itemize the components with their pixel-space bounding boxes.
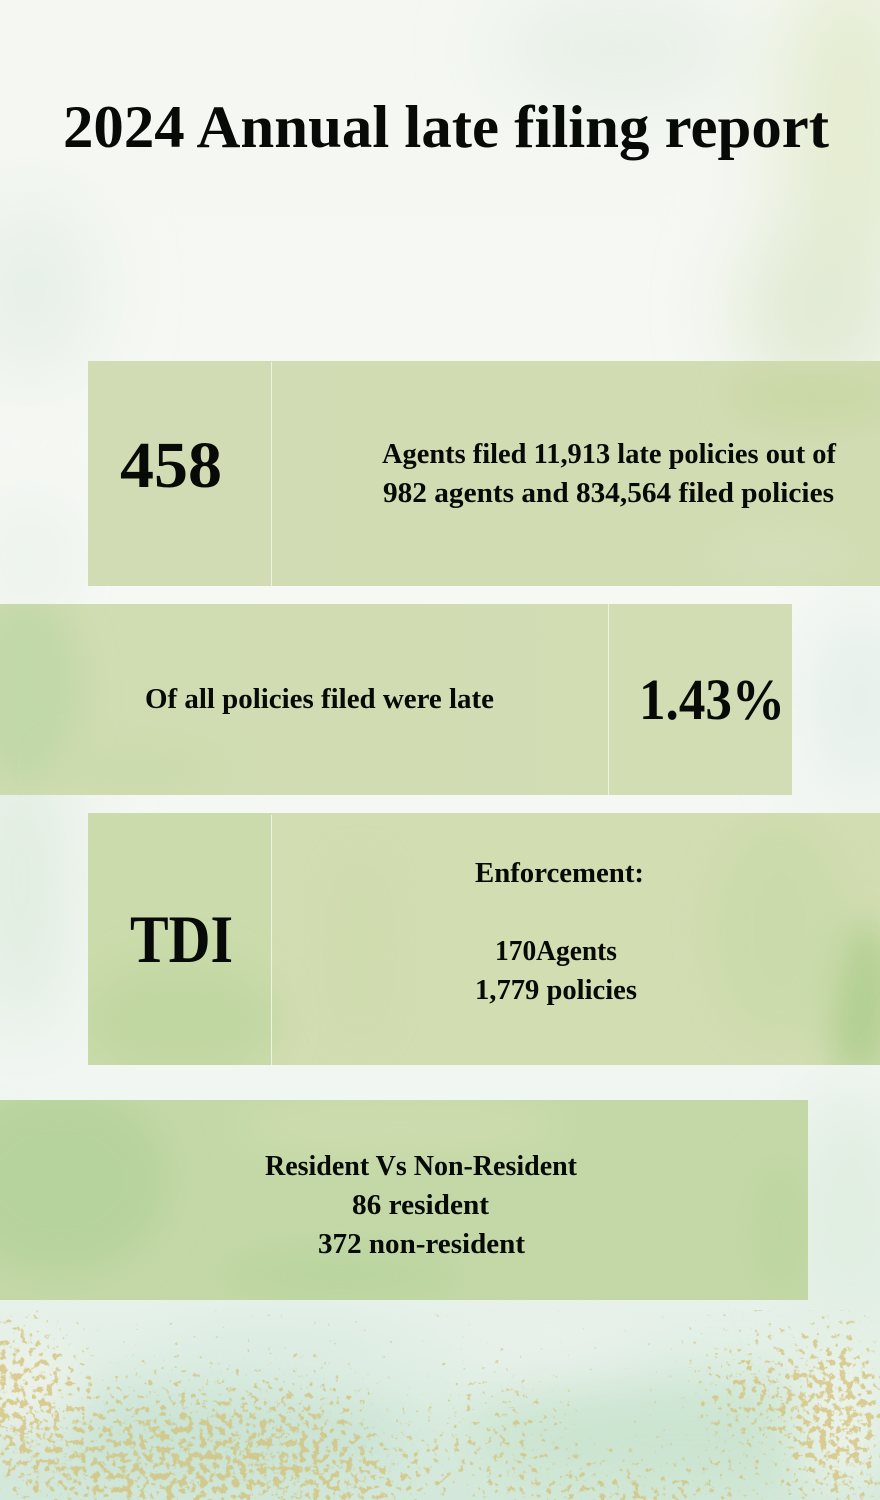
- panel: 458 agents: [88, 361, 880, 586]
- title: 2024 Annual late filing report: [63, 94, 829, 160]
- enforcement details: [475, 858, 644, 1006]
- resident breakdown: Resident Vs Non-Resident: [265, 1151, 578, 1182]
- gold glitter speckles: [0, 1310, 880, 1500]
- panel background: [0, 604, 792, 795]
- panel: resident vs non-resident: [0, 1085, 810, 1303]
- description: late share: Of all policies filed were late: [145, 684, 494, 715]
- stat: 458: 458: [120, 429, 222, 502]
- stat: 1.43%: 1.43%: [639, 667, 785, 732]
- resident breakdown: 86 resident: [352, 1190, 490, 1221]
- panel background: [88, 813, 880, 1065]
- resident breakdown: 372 non-resident: [318, 1229, 526, 1260]
- enforcement details: 1,779 policies: [475, 975, 637, 1006]
- panel: enforcement: [80, 813, 880, 1080]
- description: agents: [382, 439, 837, 509]
- panel background: [0, 1100, 808, 1300]
- description: agents: Agents filed 11,913 late policies out of: [382, 439, 837, 470]
- panel background: [88, 361, 880, 586]
- panel: share of late policies: [0, 595, 792, 800]
- description: agents: 982 agents and 834,564 filed policies: [383, 478, 834, 509]
- enforcement details: 170Agents: [495, 936, 617, 967]
- resident breakdown: [265, 1151, 578, 1260]
- stat: TDI: TDI: [130, 901, 233, 977]
- enforcement details: Enforcement:: [475, 858, 644, 889]
